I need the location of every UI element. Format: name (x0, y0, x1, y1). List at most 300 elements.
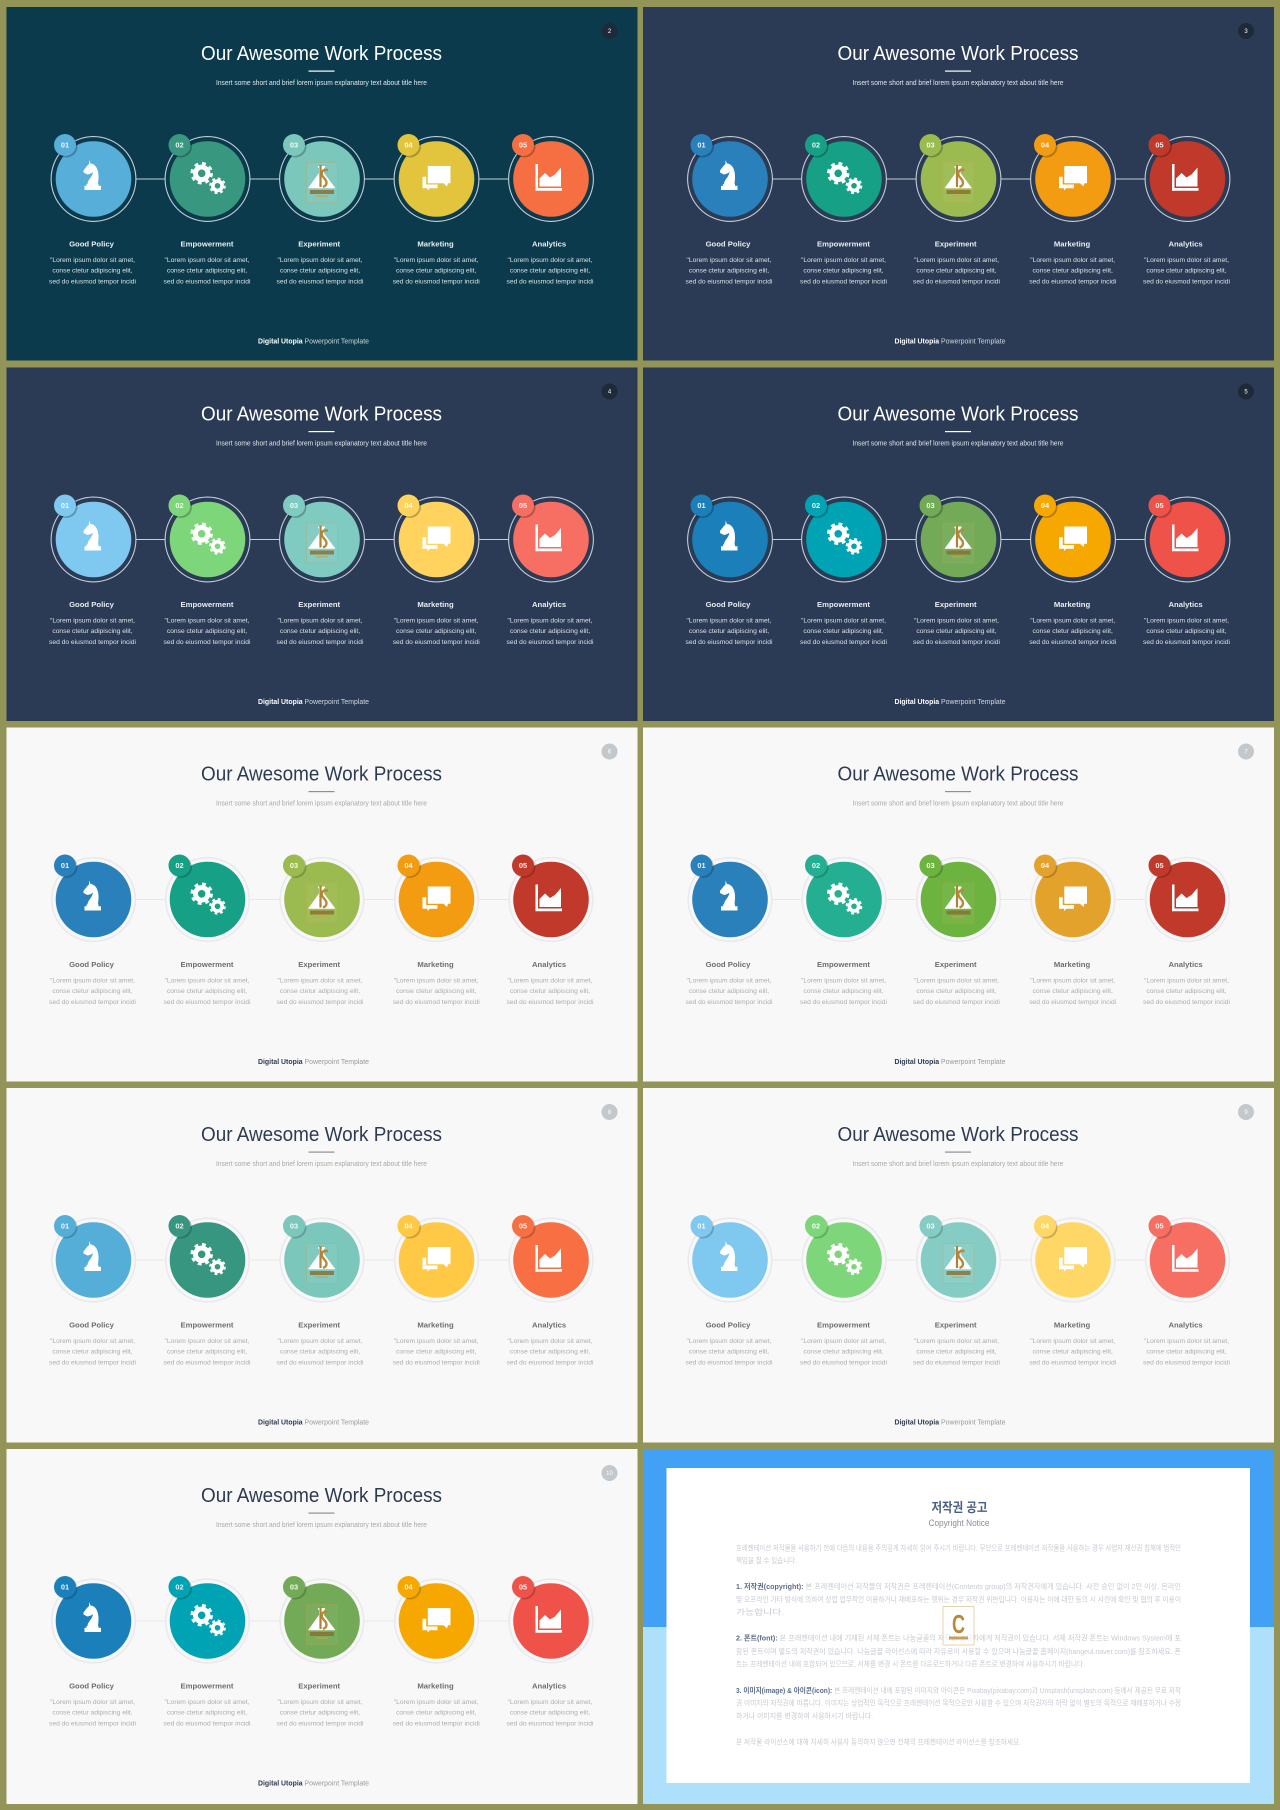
body text: "Lorem ipsum dolor sit amet, (508, 1338, 593, 1345)
subtitle: Insert some short and brief lorem ipsum explanatory text about title here (216, 1161, 427, 1168)
body text: "Lorem ipsum dolor sit amet, (50, 1338, 135, 1345)
body text: conse ctetur adipiscing elit, (52, 1710, 133, 1717)
heading: Empowerment (181, 1320, 234, 1330)
body text: conse ctetur adipiscing elit, (1033, 628, 1113, 635)
body text: sed do eiusmod tempor incidi (277, 278, 364, 285)
body text: sed do eiusmod tempor incidi (164, 1359, 251, 1366)
icon: area chart (536, 524, 562, 551)
clause 3: image and icon: 권 이미지의 저작권에 따릅니다. 이미지는 상업적인 목적으로 프레젠테이션 목적으로만 사용할 수 있으며 저작권자의 허락 없이 별도의 목적으로 재배포하거나 수정 (736, 1698, 1181, 1708)
body text: "Lorem ipsum dolor sit amet, (914, 1338, 999, 1345)
footer: Digital Utopia Powerpoint Template (258, 338, 369, 346)
title: Our Awesome Work Process (201, 404, 442, 426)
body text: "Lorem ipsum dolor sit amet, (801, 1338, 886, 1345)
badge 03 (283, 494, 306, 518)
page number: 3 (1244, 29, 1248, 35)
body text: sed do eiusmod tempor incidi (507, 999, 594, 1006)
heading: Marketing (417, 960, 454, 969)
step 02: Empowerment (164, 1576, 251, 1727)
panel background (643, 728, 1274, 1082)
clause 1: copyright (736, 1582, 1181, 1616)
title: Our Awesome Work Process (838, 43, 1078, 65)
body text (277, 1338, 364, 1366)
heading: Experiment (298, 600, 341, 609)
heading: Good Policy (706, 600, 751, 609)
connectors (136, 1259, 508, 1261)
circle (280, 1218, 364, 1302)
panel background (6, 368, 638, 721)
icon: chat bubbles (1059, 526, 1087, 551)
body text: "Lorem ipsum dolor sit amet, (50, 978, 135, 984)
body text: "Lorem ipsum dolor sit amet, (687, 618, 772, 624)
icon: flask logo (306, 1244, 338, 1284)
body text (686, 1338, 773, 1366)
heading: Good Policy (69, 1682, 115, 1690)
body text (913, 1338, 1001, 1366)
body text: sed do eiusmod tempor incidi (1143, 999, 1231, 1006)
badge 04: 04 (1041, 1222, 1050, 1231)
body text (277, 978, 364, 1006)
badge 04: 04 (404, 861, 413, 870)
heading: Good Policy (69, 960, 115, 969)
footer: Digital Utopia Powerpoint Template (258, 1780, 369, 1788)
body text (393, 618, 480, 646)
body text (393, 978, 480, 1006)
circle (509, 858, 593, 941)
badge 05 (1148, 134, 1172, 158)
body text: conse ctetur adipiscing elit, (396, 268, 476, 275)
body text: sed do eiusmod tempor incidi (164, 278, 251, 285)
body text (800, 257, 888, 285)
step 02: Empowerment (800, 134, 888, 285)
step 02: Empowerment (164, 134, 251, 285)
heading: Empowerment (817, 600, 870, 609)
badge 02 (168, 134, 192, 158)
body text: conse ctetur adipiscing elit, (1146, 268, 1227, 275)
heading: Analytics (532, 960, 566, 969)
icon: flask logo (306, 1604, 338, 1644)
subtitle: Insert some short and brief lorem ipsum explanatory text about title here (216, 800, 427, 808)
body text (507, 1699, 594, 1727)
heading: Good Policy (706, 240, 751, 248)
badge 04: 04 (1041, 141, 1050, 150)
slide 7: light green palette (643, 728, 1274, 1082)
body text: conse ctetur adipiscing elit, (1033, 1349, 1113, 1356)
title: Our Awesome Work Process (201, 1124, 442, 1146)
body text (507, 257, 594, 285)
body text: sed do eiusmod tempor incidi (393, 1720, 480, 1727)
badge 03: 03 (290, 141, 298, 150)
circle (395, 858, 478, 941)
badge 03 (283, 1576, 306, 1600)
badge 02 (168, 494, 192, 518)
circle (1031, 1218, 1115, 1302)
step 04: Marketing (1029, 134, 1117, 285)
icon: area chart (536, 164, 562, 191)
body text: sed do eiusmod tempor incidi (277, 999, 364, 1006)
icon: chat bubbles (422, 526, 450, 551)
body text (164, 1338, 251, 1366)
page number: 7 (1244, 750, 1248, 756)
body text: sed do eiusmod tempor incidi (1029, 999, 1117, 1006)
icon: flask logo (306, 162, 338, 202)
badge 04 (398, 134, 421, 158)
body text: "Lorem ipsum dolor sit amet, (687, 257, 772, 264)
badge 02: 02 (175, 141, 184, 150)
heading: Empowerment (817, 240, 870, 248)
step 04: Marketing (393, 134, 480, 285)
badge 04 (398, 1576, 421, 1600)
badge 02 (168, 1576, 192, 1600)
panel background (6, 1449, 638, 1804)
badge 01: 01 (61, 1583, 69, 1592)
step 01: Good Policy (49, 1215, 137, 1366)
body text: "Lorem ipsum dolor sit amet, (394, 618, 479, 624)
body text: "Lorem ipsum dolor sit amet, (394, 257, 479, 264)
badge 01 (54, 134, 78, 158)
icon: chess knight (720, 520, 738, 550)
body text (1143, 1338, 1231, 1366)
panel background (643, 7, 1274, 360)
badge 02: 02 (175, 1222, 184, 1231)
body text: "Lorem ipsum dolor sit amet, (1144, 1338, 1229, 1345)
heading: Empowerment (181, 960, 234, 969)
badge 01: 01 (61, 141, 69, 150)
body text: conse ctetur adipiscing elit, (280, 1710, 360, 1717)
badge 03: 03 (290, 1222, 298, 1231)
icon: gears (192, 884, 225, 914)
page number (1238, 384, 1254, 400)
heading: Analytics (1169, 240, 1203, 248)
body text (49, 1338, 137, 1366)
step 02: Empowerment (164, 854, 251, 1006)
heading: Marketing (417, 240, 454, 248)
badge 05 (1148, 1215, 1172, 1238)
heading: Experiment (298, 1320, 341, 1330)
badge 05: 05 (519, 141, 527, 150)
badge 05: 05 (1155, 141, 1164, 150)
intro paragraph (736, 1544, 1181, 1565)
circle (1145, 497, 1230, 582)
step 02: Empowerment (800, 1215, 888, 1366)
body text: sed do eiusmod tempor incidi (800, 999, 888, 1006)
heading: Experiment (935, 960, 977, 969)
body text: sed do eiusmod tempor incidi (164, 1720, 251, 1727)
body text: "Lorem ipsum dolor sit amet, (508, 978, 593, 984)
heading: Empowerment (817, 1320, 870, 1330)
body text: "Lorem ipsum dolor sit amet, (801, 618, 886, 624)
step 03: Experiment (277, 854, 364, 1006)
footer: Digital Utopia Powerpoint Template (894, 699, 1006, 706)
body text: "Lorem ipsum dolor sit amet, (687, 1338, 772, 1345)
footer: Digital Utopia Powerpoint Template (894, 1420, 1006, 1426)
circle (688, 137, 772, 221)
step 01: Good Policy (686, 1215, 773, 1366)
subtitle: Insert some short and brief lorem ipsum explanatory text about title here (216, 1522, 427, 1529)
body text: "Lorem ipsum dolor sit amet, (165, 257, 250, 264)
circle (280, 858, 364, 941)
body text: sed do eiusmod tempor incidi (507, 1720, 594, 1727)
step 04: Marketing (393, 1215, 480, 1366)
panel background (6, 7, 638, 360)
body text: "Lorem ipsum dolor sit amet, (1144, 257, 1229, 264)
icon: chat bubbles (422, 1608, 450, 1632)
connectors (772, 898, 1145, 900)
circle (51, 497, 136, 582)
heading: Marketing (1054, 960, 1090, 969)
circle (688, 858, 772, 941)
body text: "Lorem ipsum dolor sit amet, (914, 618, 999, 624)
body text: conse ctetur adipiscing elit, (916, 1349, 997, 1356)
body text (1143, 257, 1231, 285)
circle (52, 1218, 135, 1302)
step 04: Marketing (1029, 854, 1117, 1006)
body text (393, 257, 480, 285)
badge 01: 01 (697, 1222, 706, 1231)
icon: chess knight (720, 880, 738, 910)
badge 05: 05 (519, 1222, 527, 1231)
badge 02 (805, 1215, 828, 1238)
intro paragraph: 프레젠테이션 저작물을 사용하기 전에 다음의 내용을 주의깊게 자세히 읽어 주시기 바랍니다. 무단으로 프레젠테이션 저작물을 사용하는 경우 사업자 재산권 침해에 법적인 (736, 1544, 1181, 1552)
badge 03 (283, 134, 306, 158)
body text (686, 257, 773, 285)
body text (800, 618, 888, 646)
body text: conse ctetur adipiscing elit, (1146, 988, 1227, 995)
icon: chess knight (84, 880, 101, 910)
body text (1143, 978, 1231, 1006)
body text: conse ctetur adipiscing elit, (52, 628, 133, 635)
body text: "Lorem ipsum dolor sit amet, (1030, 257, 1115, 264)
heading: Empowerment (181, 1682, 234, 1690)
step 02: Empowerment (164, 494, 251, 646)
body text (913, 618, 1001, 646)
body text: conse ctetur adipiscing elit, (167, 268, 247, 275)
page number (602, 1465, 618, 1481)
body text: "Lorem ipsum dolor sit amet, (278, 1338, 363, 1345)
body text: sed do eiusmod tempor incidi (1143, 639, 1231, 646)
body text: "Lorem ipsum dolor sit amet, (914, 257, 999, 264)
icon: chat bubbles (1059, 1247, 1087, 1272)
page number (602, 384, 618, 400)
circle (1031, 137, 1115, 221)
badge 05 (512, 1215, 536, 1238)
circle (394, 137, 479, 221)
badge 03 (920, 1215, 943, 1238)
page number (1238, 744, 1254, 760)
clause 2: font (736, 1634, 1181, 1668)
step 05: Analytics (507, 1215, 594, 1366)
body text: "Lorem ipsum dolor sit amet, (278, 257, 363, 264)
circle (394, 497, 479, 582)
circle (52, 858, 135, 941)
heading: Empowerment (181, 600, 234, 609)
body text (507, 1338, 594, 1366)
body text: "Lorem ipsum dolor sit amet, (508, 618, 593, 624)
body text: sed do eiusmod tempor incidi (913, 1359, 1001, 1366)
badge 02: 02 (812, 1222, 820, 1231)
heading: Analytics (1169, 1320, 1203, 1330)
step 01: Good Policy (49, 854, 137, 1006)
icon: chess knight (84, 160, 101, 190)
body text: conse ctetur adipiscing elit, (510, 988, 590, 995)
step 03: Experiment (913, 494, 1001, 646)
body text: sed do eiusmod tempor incidi (507, 639, 594, 646)
slide 5: navy vivid palette (643, 368, 1274, 721)
body text: conse ctetur adipiscing elit, (167, 628, 247, 635)
icon: gears (192, 1606, 225, 1635)
body text: conse ctetur adipiscing elit, (52, 268, 133, 275)
badge 01 (690, 134, 714, 158)
step 02: Empowerment (800, 854, 888, 1006)
body text: conse ctetur adipiscing elit, (1146, 628, 1227, 635)
heading: Empowerment (817, 960, 870, 969)
circle (1145, 137, 1230, 221)
circle (916, 497, 1001, 582)
body text (1029, 978, 1117, 1006)
circle (509, 1218, 593, 1302)
page number (602, 1104, 618, 1120)
badge 02 (805, 854, 828, 878)
step 04: Marketing (1029, 1215, 1117, 1366)
slide 3: navy flat palette (643, 7, 1274, 360)
body text: conse ctetur adipiscing elit, (396, 628, 476, 635)
page number (1238, 1104, 1254, 1120)
body text: conse ctetur adipiscing elit, (689, 628, 769, 635)
badge 03 (920, 134, 943, 158)
body text (913, 257, 1001, 285)
body text (1029, 618, 1117, 646)
step 03: Experiment (913, 134, 1001, 285)
badge 05 (1148, 854, 1172, 878)
page number: 8 (608, 1110, 612, 1116)
body text: sed do eiusmod tempor incidi (277, 1720, 364, 1727)
body text: "Lorem ipsum dolor sit amet, (165, 618, 250, 624)
badge 04 (398, 494, 421, 518)
circle (165, 137, 250, 221)
body text: conse ctetur adipiscing elit, (280, 1349, 360, 1356)
body text (507, 618, 594, 646)
heading: Experiment (298, 1682, 341, 1690)
icon: flask logo (943, 1244, 974, 1284)
step 03: Experiment (277, 494, 364, 646)
centre logo (943, 1606, 974, 1645)
body text: "Lorem ipsum dolor sit amet, (165, 978, 250, 984)
body text: conse ctetur adipiscing elit, (396, 988, 476, 995)
badge 05 (512, 494, 536, 518)
icon: gears (828, 1244, 861, 1274)
circle (395, 1218, 478, 1302)
slide 8: light warm palette (6, 1088, 638, 1442)
body text: sed do eiusmod tempor incidi (393, 639, 480, 646)
icon: chat bubbles (1059, 166, 1087, 190)
step 01: Good Policy (686, 854, 773, 1006)
body text: "Lorem ipsum dolor sit amet, (508, 257, 593, 264)
panel background (643, 368, 1274, 721)
clause 2: font: 함된 폰트이며 별도의 저작권이 있습니다. 나눔글꼴 라이선스에 따라 자유로이 사용할 수 있으며 나눔글꼴 홈페이지(hangeul.naver.com)를 참조하세요. 폰 (736, 1647, 1181, 1656)
body text: sed do eiusmod tempor incidi (913, 278, 1001, 285)
circle (802, 137, 886, 221)
circle (280, 137, 364, 221)
badge 03: 03 (290, 501, 298, 510)
body text: sed do eiusmod tempor incidi (1029, 1359, 1117, 1366)
badge 01: 01 (61, 501, 69, 510)
heading: Experiment (298, 240, 341, 248)
icon: area chart (536, 1245, 562, 1272)
body text: conse ctetur adipiscing elit, (916, 268, 997, 275)
subtitle: Insert some short and brief lorem ipsum explanatory text about title here (852, 800, 1064, 808)
body text: "Lorem ipsum dolor sit amet, (394, 1699, 479, 1706)
footer: Digital Utopia Powerpoint Template (894, 338, 1006, 346)
icon: area chart (536, 1606, 562, 1633)
notice subtitle: Copyright Notice (928, 1518, 990, 1528)
circle (166, 858, 249, 941)
connectors (136, 898, 508, 900)
body text: conse ctetur adipiscing elit, (1146, 1349, 1227, 1356)
icon: chess knight (720, 1241, 738, 1271)
step 05: Analytics (1143, 134, 1231, 285)
badge 05: 05 (1155, 501, 1164, 510)
body text: sed do eiusmod tempor incidi (800, 1359, 888, 1366)
clause 1: copyright: 1. 저작권(copyright): 본 프레젠테이션 저작물의 저작권은 프레젠테이션(Contents group)의 저작권자에게 있습니다. 사전 승인 없이 2인 이상, 온라인 (736, 1582, 1181, 1591)
step 01: Good Policy (686, 134, 773, 285)
body text: conse ctetur adipiscing elit, (167, 988, 247, 995)
heading: Analytics (1169, 600, 1203, 609)
badge 01: 01 (697, 141, 706, 150)
icon: flask logo (943, 523, 974, 563)
body text: sed do eiusmod tempor incidi (164, 999, 251, 1006)
body text: sed do eiusmod tempor incidi (49, 1720, 137, 1727)
badge 03: 03 (926, 861, 935, 870)
slide 4: navy pastel palette (6, 368, 638, 721)
heading: Analytics (532, 1320, 566, 1330)
body text: "Lorem ipsum dolor sit amet, (914, 978, 999, 984)
body text: "Lorem ipsum dolor sit amet, (50, 257, 135, 264)
badge 02 (805, 494, 828, 518)
centre logo: C (952, 1609, 965, 1639)
body text (800, 1338, 888, 1366)
step 05: Analytics (507, 134, 594, 285)
circle (688, 1218, 772, 1302)
circle (509, 497, 593, 582)
body text: conse ctetur adipiscing elit, (280, 988, 360, 995)
clause 3: image and icon (736, 1686, 1181, 1720)
subtitle: Insert some short and brief lorem ipsum explanatory text about title here (852, 1161, 1064, 1168)
slide 11: copyright notice (643, 1449, 1274, 1804)
page number (602, 23, 618, 39)
subtitle: Insert some short and brief lorem ipsum explanatory text about title here (852, 440, 1064, 448)
step 02: Empowerment (800, 494, 888, 646)
icon: flask logo (943, 162, 974, 202)
icon: area chart (1172, 164, 1198, 191)
body text: conse ctetur adipiscing elit, (510, 628, 590, 635)
body text: sed do eiusmod tempor incidi (1143, 1359, 1231, 1366)
body text (913, 978, 1001, 1006)
body text: conse ctetur adipiscing elit, (280, 628, 360, 635)
body text: conse ctetur adipiscing elit, (1033, 268, 1113, 275)
circle (802, 1218, 886, 1302)
step 01: Good Policy (49, 134, 137, 285)
body text: sed do eiusmod tempor incidi (800, 278, 888, 285)
body text: sed do eiusmod tempor incidi (686, 1359, 773, 1366)
badge 01 (54, 494, 78, 518)
step 05: Analytics (1143, 854, 1231, 1006)
body text: "Lorem ipsum dolor sit amet, (278, 1699, 363, 1706)
clause 3: image and icon: 하거나 이미지를 변경하여 사용하시기 바랍니다. (736, 1712, 873, 1720)
body text: "Lorem ipsum dolor sit amet, (687, 978, 772, 984)
body text (507, 978, 594, 1006)
body text: sed do eiusmod tempor incidi (164, 639, 251, 646)
body text: sed do eiusmod tempor incidi (1143, 278, 1231, 285)
step 05: Analytics (507, 494, 594, 646)
